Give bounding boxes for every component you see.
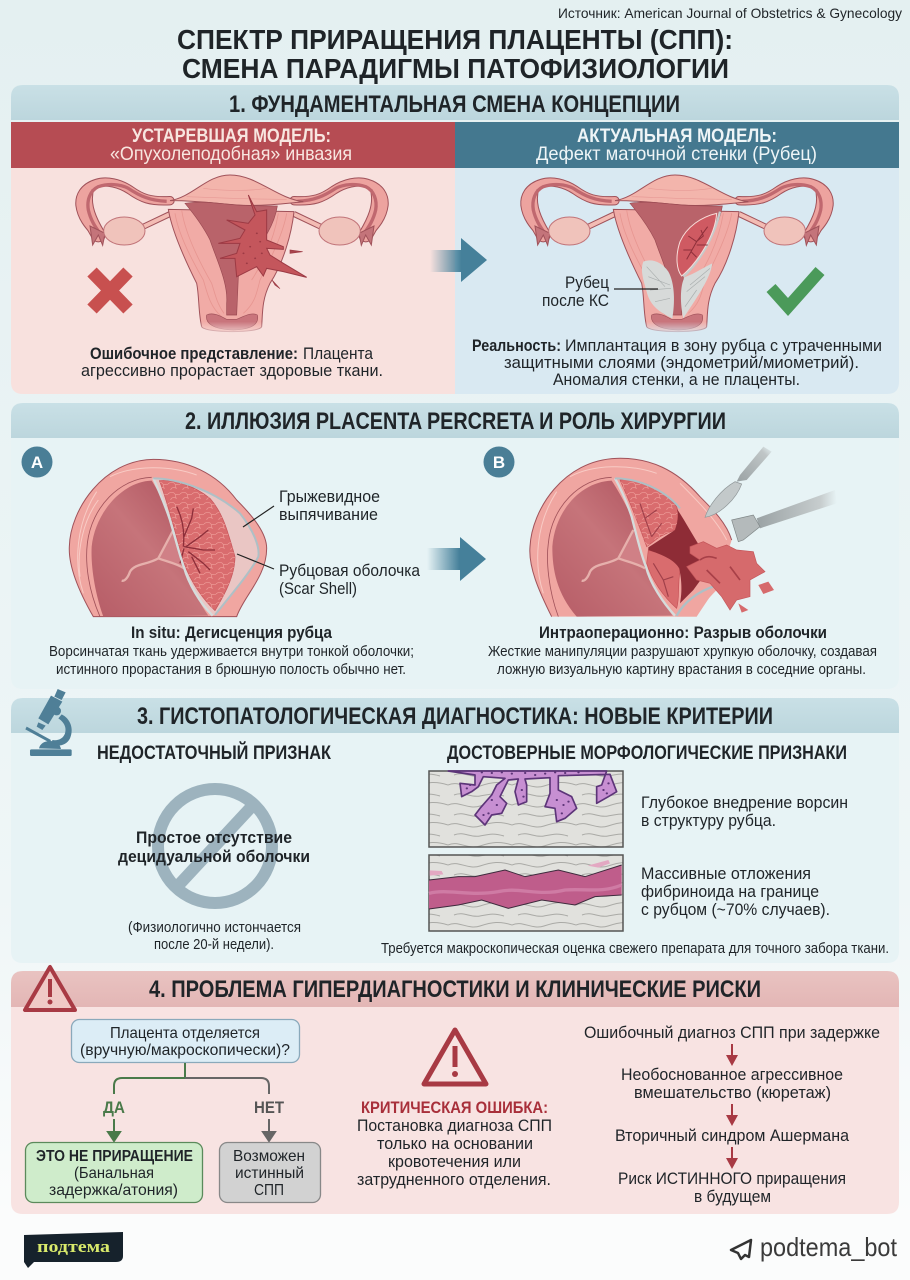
text: misconception: Плацента (303, 344, 373, 363)
text: absence of decidua: Простое отсутствие (136, 828, 292, 847)
scar label: Рубец (565, 274, 610, 292)
source line: Источник: American Journal of Obstetrics & Gynecology (558, 5, 902, 21)
text: absence of decidua (118, 828, 310, 866)
section 4 heading (11, 971, 899, 1007)
badge A: A (31, 453, 43, 472)
icon: warning small (25, 967, 75, 1010)
title: СМЕНА ПАРАДИГМЫ ПАТОФИЗИОЛОГИИ (182, 53, 729, 84)
outcome: not accreta: (Банальная (74, 1165, 154, 1182)
risk cascade: Ошибочный диагноз СПП при задержке (584, 1023, 880, 1042)
current model banner: АКТУАЛЬНАЯ МОДЕЛЬ: (577, 125, 777, 147)
text: deep villi (641, 793, 848, 830)
text: misconception (81, 344, 383, 380)
panel 4: overdiagnosis (11, 967, 899, 1214)
badge: podtema: подтема (37, 1237, 111, 1256)
question box: Плацента отделяется (110, 1025, 260, 1042)
caption A (49, 623, 414, 678)
text: critical error: кровотечения или (388, 1153, 521, 1171)
note: physiological thinning (128, 919, 301, 953)
risk cascade: Вторичный синдром Ашермана (615, 1126, 850, 1145)
scar label: после КС (542, 292, 609, 310)
risk cascade: Риск ИСТИННОГО приращения (618, 1169, 846, 1188)
label: scar shell: Рубцовая оболочка (279, 561, 420, 580)
icon: warning large (424, 1030, 486, 1084)
illustration: uterus with caesarean scar (525, 175, 829, 336)
label: hernia bulge: выпячивание (279, 505, 378, 524)
label: hernia bulge (243, 487, 380, 527)
caption B: ложную визуальную картину врастания в соседние органы. (497, 661, 866, 678)
label: scar shell (237, 554, 420, 598)
text: critical error: КРИТИЧЕСКАЯ ОШИБКА: (361, 1098, 548, 1117)
text: critical error: затрудненного отделения. (357, 1171, 551, 1189)
flowchart (26, 1020, 320, 1202)
badge B: B (493, 453, 505, 472)
icon: forceps (732, 490, 837, 542)
outcome: possible true accreta: истинный (235, 1165, 304, 1182)
outcome: possible true accreta: СПП (254, 1182, 284, 1199)
section 4 heading: 4. ПРОБЛЕМА ГИПЕРДИАГНОСТИКИ И КЛИНИЧЕСКИЕ РИСКИ (149, 976, 761, 1003)
heading: insufficient sign: НЕДОСТАТОЧНЫЙ ПРИЗНАК (97, 740, 331, 764)
text: misconception: Ошибочное представление: (90, 344, 298, 363)
illustration B: shell rupture (530, 458, 774, 617)
risk cascade: в будущем (694, 1187, 771, 1206)
current model banner: Дефект маточной стенки (Рубец) (536, 143, 817, 165)
question box: (вручную/макроскопически)? (80, 1042, 290, 1059)
outcome: possible true accreta (220, 1142, 320, 1202)
note: physiological thinning: (Физиологично истончается (128, 919, 301, 936)
current model banner (455, 122, 899, 168)
panel 3: histopathology (11, 689, 899, 963)
text: reality: Аномалия стенки, а не плаценты. (553, 370, 800, 389)
section 2 heading (11, 403, 899, 438)
outcome: not accreta: ЭТО НЕ ПРИРАЩЕНИЕ (36, 1148, 193, 1165)
text: critical error (357, 1098, 552, 1189)
scar label (542, 274, 658, 310)
risk cascade: вмешательство (кюретаж) (634, 1083, 831, 1102)
caption A: In situ: Дегисценция рубца (131, 623, 332, 642)
panel 2: percreta illusion (11, 403, 899, 689)
caption B: Интраоперационно: Разрыв оболочки (539, 623, 827, 642)
badge A (22, 446, 52, 478)
icon: red cross (92, 272, 128, 309)
section 2 heading: 2. ИЛЛЮЗИЯ PLACENTA PERCRETA И РОЛЬ ХИРУРГИИ (185, 408, 726, 435)
connector: yes branch (108, 1063, 185, 1141)
arrow: A to B (427, 537, 486, 581)
connector: no branch (185, 1078, 275, 1141)
badge: podtema (24, 1232, 123, 1268)
label: no: НЕТ (254, 1098, 285, 1117)
text: critical error: Постановка диагноза СПП (357, 1117, 552, 1135)
caption A: Ворсинчатая ткань удерживается внутри тонкой оболочки; (49, 643, 414, 660)
text: misconception: агрессивно прорастает здоровые ткани. (81, 361, 383, 380)
caption A: истинного прорастания в брюшную полость обычно нет. (56, 661, 406, 678)
arrow: old to new (430, 238, 487, 282)
micrograph: fibrinoid deposits (429, 855, 623, 931)
arrow: cascade step 2 (726, 1104, 738, 1126)
text: fibrinoid: фибриноида на границе (641, 882, 819, 901)
text: deep villi: Глубокое внедрение ворсин (641, 793, 848, 812)
badge B (484, 446, 514, 478)
section 1 heading (11, 85, 899, 120)
illustration: uterus with tumour-like invasion (80, 175, 384, 336)
text: deep villi: в структуру рубца. (641, 811, 776, 830)
label: yes: ДА (103, 1098, 125, 1117)
outdated model banner (11, 122, 455, 168)
arrow: cascade step 1 (726, 1044, 738, 1066)
illustration A: scar dehiscence (69, 459, 267, 617)
title (177, 24, 733, 84)
text: reality: Имплантация в зону рубца с утраченными (565, 336, 882, 355)
panel 1: concept shift (11, 85, 899, 394)
title: СПЕКТР ПРИРАЩЕНИЯ ПЛАЦЕНТЫ (СПП): (177, 24, 733, 55)
section 3 heading: 3. ГИСТОПАТОЛОГИЧЕСКАЯ ДИАГНОСТИКА: НОВЫЕ КРИТЕРИИ (137, 703, 773, 730)
label: scar shell: (Scar Shell) (279, 579, 357, 598)
text: fibrinoid (641, 864, 830, 919)
text: reality: защитными слоями (эндометрий/миометрий). (504, 353, 859, 372)
question box (72, 1020, 300, 1062)
outcome: possible true accreta: Возможен (233, 1148, 305, 1165)
label: hernia bulge: Грыжевидное (279, 487, 380, 506)
icon: microscope (25, 689, 72, 756)
risk cascade (584, 1023, 880, 1206)
icon: scalpel (705, 447, 772, 517)
text: absence of decidua: децидуальной оболочки (118, 847, 310, 866)
arrow: cascade step 3 (726, 1147, 738, 1169)
risk cascade: Необоснованное агрессивное (621, 1065, 843, 1084)
footer handle: podtema_bot (760, 1232, 898, 1262)
caption B (488, 623, 877, 678)
outcome: not accreta: задержка/атония) (49, 1182, 178, 1199)
note: physiological thinning: после 20-й недели). (154, 936, 274, 953)
outdated model banner: «Опухолеподобная» инвазия (110, 143, 352, 165)
text: reality: Реальность: (472, 336, 561, 355)
icon: green check (771, 271, 820, 307)
text: fibrinoid: Массивные отложения (641, 864, 811, 883)
text: critical error: только на основании (377, 1135, 533, 1153)
icon: prohibition sign (158, 789, 272, 903)
micrograph: villi invading scar (429, 771, 623, 847)
section 1 heading: 1. ФУНДАМЕНТАЛЬНАЯ СМЕНА КОНЦЕПЦИИ (229, 91, 680, 118)
text: fibrinoid: с рубцом (~70% случаев). (641, 900, 830, 919)
text: reality (472, 336, 882, 389)
outcome: not accreta (26, 1142, 202, 1202)
outdated model banner: УСТАРЕВШАЯ МОДЕЛЬ: (132, 125, 331, 147)
section 3 heading (11, 698, 899, 733)
